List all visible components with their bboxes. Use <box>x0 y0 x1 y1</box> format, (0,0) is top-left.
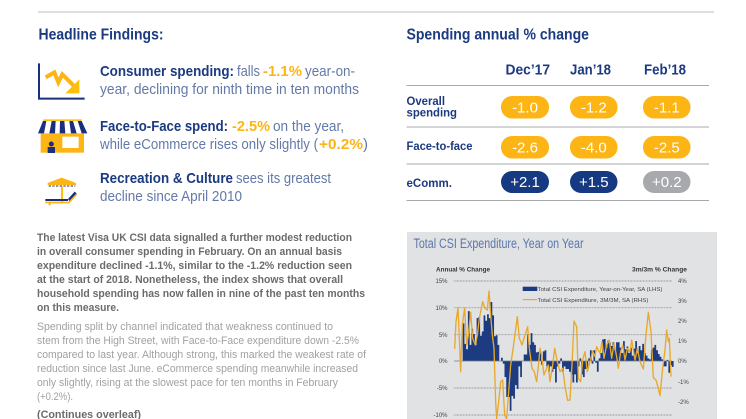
table: spending annual change: -1.2 <box>581 100 607 116</box>
finding: face-to-face spend: on the year, <box>273 118 344 135</box>
table: spending annual change: +2.1 <box>510 174 540 191</box>
chart title: Total CSI Expenditure, Year on Year <box>414 236 584 251</box>
right axis labels: 1% <box>678 339 687 345</box>
left axis labels <box>433 279 448 419</box>
text block: channel split: Spending split by channel indicated that weakness continued to <box>37 321 333 333</box>
panel: CSI expenditure chart <box>407 232 717 419</box>
table: spending annual change: Dec’17 <box>506 62 550 78</box>
text block: channel split: reduction since last June. eCommerce spending meanwhile increased <box>37 363 358 375</box>
axis titles: 3m/3m % Change <box>632 266 687 274</box>
finding: recreation and culture: decline since April 2010 <box>100 188 242 205</box>
text block: channel split: only slightly, rising at the slowest pace for ten months in February <box>37 377 338 389</box>
text block: bold summary <box>37 232 365 314</box>
finding: recreation and culture: Recreation & Culture <box>100 170 233 187</box>
legend <box>523 287 662 304</box>
right axis labels: 4% <box>678 279 687 285</box>
left axis labels: 5% <box>439 333 448 339</box>
table: spending annual change: spending <box>406 106 457 120</box>
table: spending annual change: Face-to-face <box>406 139 473 153</box>
finding: face-to-face spend: -2.5% <box>232 118 270 135</box>
text block: bold summary: expenditure declined -1.1%, similar to the -1.2% reduction seen <box>37 260 352 272</box>
table: spending annual change: Jan’18 <box>570 62 611 78</box>
text block: bold summary: on this measure. <box>37 302 119 314</box>
finding: face-to-face spend: ) <box>363 136 368 153</box>
text block: channel split: stem from the High Street, with Face-to-Face expenditure down -2.5% <box>37 335 359 347</box>
legend: Total CSI Expenditure, 3M/3M, SA (RHS) <box>538 298 648 304</box>
text block: bold summary: at the start of 2018. Nonetheless, the index shows that overall <box>37 274 343 286</box>
table: spending annual change: -2.5 <box>654 140 680 156</box>
icon: shop front <box>38 119 87 153</box>
finding: recreation and culture <box>100 170 332 205</box>
text block: channel split: (+0.2%). <box>37 391 73 403</box>
right axis labels: -1% <box>678 380 689 386</box>
finding: face-to-face spend: +0.2% <box>319 136 363 153</box>
icon: sun lounger and parasol <box>45 178 77 205</box>
finding: consumer spending <box>100 63 359 98</box>
table: spending annual change <box>406 62 709 200</box>
zero axis <box>454 360 672 362</box>
table: spending annual change: -4.0 <box>581 140 607 156</box>
finding: consumer spending: falls <box>237 63 260 80</box>
table: spending annual change: +0.2 <box>652 174 682 191</box>
finding: consumer spending: year-on- <box>305 63 355 80</box>
bars: year-on-year expenditure <box>463 302 674 411</box>
finding: recreation and culture: sees its greatest <box>236 170 332 187</box>
finding: consumer spending: -1.1% <box>263 63 302 80</box>
right axis labels: 2% <box>678 319 687 325</box>
table: spending annual change: Overall <box>406 94 445 108</box>
left axis labels: 15% <box>435 279 448 285</box>
heading: spending annual change: Spending annual % change <box>406 26 589 44</box>
left axis labels: 10% <box>435 306 448 312</box>
axis titles: Annual % Change <box>436 266 490 274</box>
text block: bold summary: in overall consumer spending in February. On an annual basis <box>37 246 342 258</box>
text block: bold summary: household spending has now fallen in nine of the past ten months <box>37 288 365 300</box>
finding: face-to-face spend: Face-to-Face spend: <box>100 118 228 135</box>
finding: consumer spending: year, declining for ninth time in ten months <box>100 81 359 98</box>
text block: channel split <box>37 321 367 403</box>
table: spending annual change: -1.1 <box>654 100 680 116</box>
icon: falling chart <box>38 63 85 100</box>
left axis labels: -10% <box>433 413 448 419</box>
line: three-month expenditure <box>455 291 671 419</box>
legend: Total CSI Expenditure, Year-on-Year, SA (LHS) <box>538 287 662 293</box>
text block: bold summary: The latest Visa UK CSI data signalled a further modest reduction <box>37 232 352 244</box>
table: spending annual change: -2.6 <box>512 140 538 156</box>
finding: face-to-face spend <box>99 118 368 153</box>
right axis labels: 0% <box>678 359 687 365</box>
right axis labels <box>678 279 689 406</box>
table: spending annual change: +1.5 <box>579 174 609 191</box>
text block: channel split: compared to last year. Although strong, this marked the weakest rate of <box>37 349 367 361</box>
axis titles <box>436 266 687 274</box>
finding: consumer spending: Consumer spending: <box>100 63 234 80</box>
table: spending annual change: Feb’18 <box>644 62 686 78</box>
right axis labels: 3% <box>678 299 687 305</box>
finding: face-to-face spend: while eCommerce rises only slightly ( <box>99 136 318 153</box>
left axis labels: -5% <box>437 386 448 392</box>
table: spending annual change: -1.0 <box>512 100 538 116</box>
left axis labels: 0% <box>439 359 448 365</box>
table: spending annual change: eComm. <box>406 176 452 190</box>
right axis labels: -2% <box>678 400 689 406</box>
heading: headline findings: Headline Findings: <box>38 26 164 44</box>
